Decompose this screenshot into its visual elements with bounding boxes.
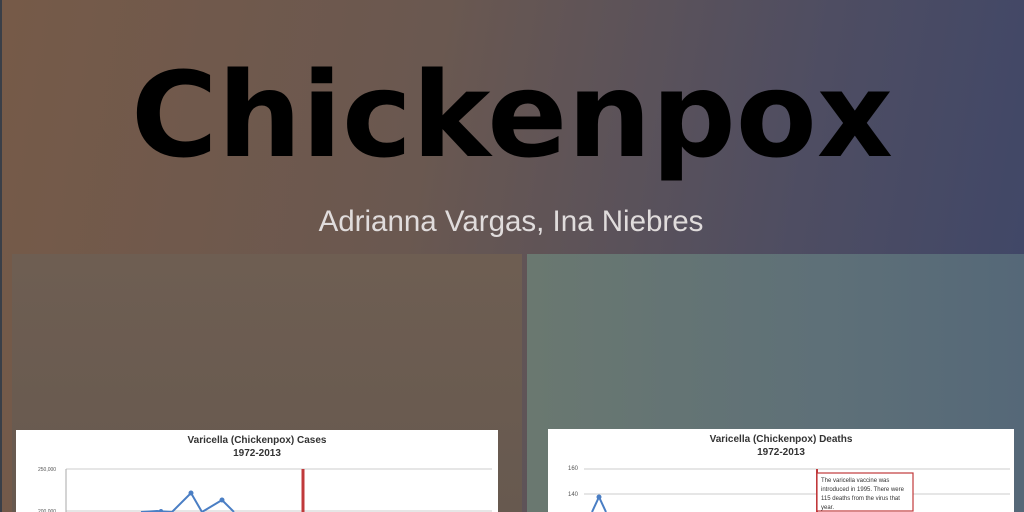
chart: deaths: 160 — [568, 466, 579, 472]
chart: deaths: introduced in 1995. There were — [821, 487, 905, 493]
chart: deaths: 140 — [568, 492, 579, 498]
chart: deaths: Varicella (Chickenpox) Deaths — [710, 434, 852, 445]
chart: deaths: year. — [821, 505, 834, 511]
chart: deaths — [548, 429, 1014, 512]
chart: deaths: 1972-2013 — [757, 447, 805, 458]
authors: Adrianna Vargas, Ina Niebres — [319, 205, 703, 238]
chart: cases — [16, 430, 498, 512]
title: Chickenpox — [131, 46, 893, 184]
panel: left — [12, 254, 522, 512]
chart: cases: 1972-2013 — [233, 448, 281, 459]
chart: deaths: The varicella vaccine was — [821, 478, 889, 484]
chart: cases: Varicella (Chickenpox) Cases — [188, 435, 326, 446]
chart: cases: 250,000 — [38, 467, 56, 473]
panel: right — [527, 254, 1024, 512]
chart: deaths: 115 deaths from the virus that — [821, 496, 900, 502]
